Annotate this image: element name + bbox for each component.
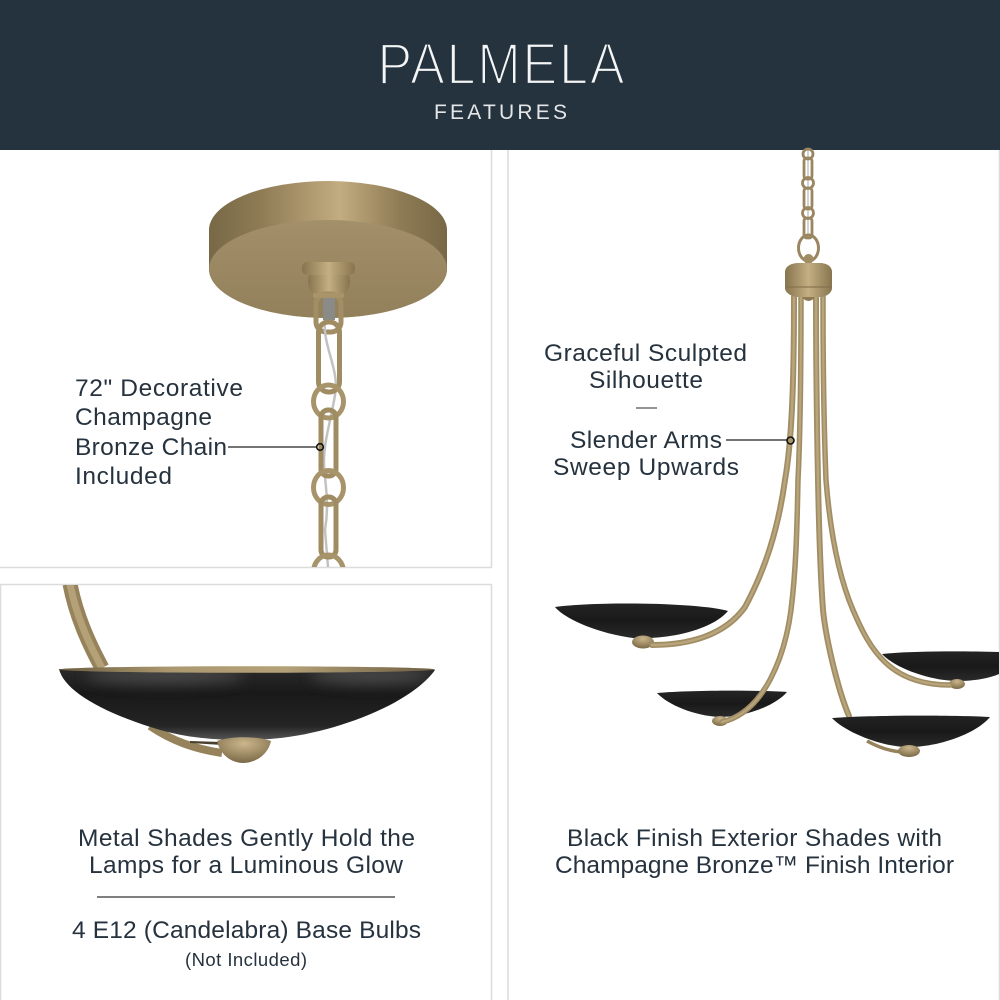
panel: shade detail <box>0 584 492 1000</box>
text: silhouette callout: Slender Arms <box>570 427 722 454</box>
icon: decorative chain <box>314 320 344 589</box>
text: shade features: Lamps for a Luminous Glow <box>89 852 403 879</box>
icon: ceiling canopy <box>209 181 447 332</box>
text: silhouette callout: Silhouette <box>589 367 703 394</box>
text: finish description <box>555 825 954 879</box>
text: shade features: (Not Included) <box>185 949 307 970</box>
text: silhouette callout: Sweep Upwards <box>553 454 739 481</box>
text: shade features <box>72 825 421 970</box>
shade: right back <box>882 651 999 689</box>
text: finish description: Black Finish Exterior Shades with <box>567 825 942 852</box>
icon: chandelier <box>555 149 999 757</box>
text: silhouette callout: Graceful Sculpted <box>544 340 747 367</box>
callout: chain: 72" Decorative <box>75 375 243 402</box>
icon: shade close-up <box>59 584 435 763</box>
text: silhouette callout <box>544 340 794 481</box>
shade: upper left <box>555 604 728 648</box>
panel: full fixture <box>508 149 1000 1000</box>
text: shade features: 4 E12 (Candelabra) Base Bulbs <box>72 917 421 944</box>
callout: chain: Included <box>75 463 172 490</box>
title: PALMELA <box>378 31 625 97</box>
callout: chain: Champagne <box>75 404 212 431</box>
subtitle: FEATURES <box>434 101 567 124</box>
header band <box>0 0 1000 150</box>
arms <box>652 297 950 722</box>
hanging chain <box>798 149 818 261</box>
shade: lower left <box>657 691 787 726</box>
text: finish description: Champagne Bronze™ Finish Interior <box>555 852 954 879</box>
panel: chain and canopy <box>0 150 492 589</box>
callout: chain: Bronze Chain <box>75 434 227 461</box>
shade: front right <box>832 716 990 757</box>
top cap <box>785 254 832 301</box>
callout: chain <box>75 375 323 490</box>
text: shade features: Metal Shades Gently Hold the <box>78 825 415 852</box>
